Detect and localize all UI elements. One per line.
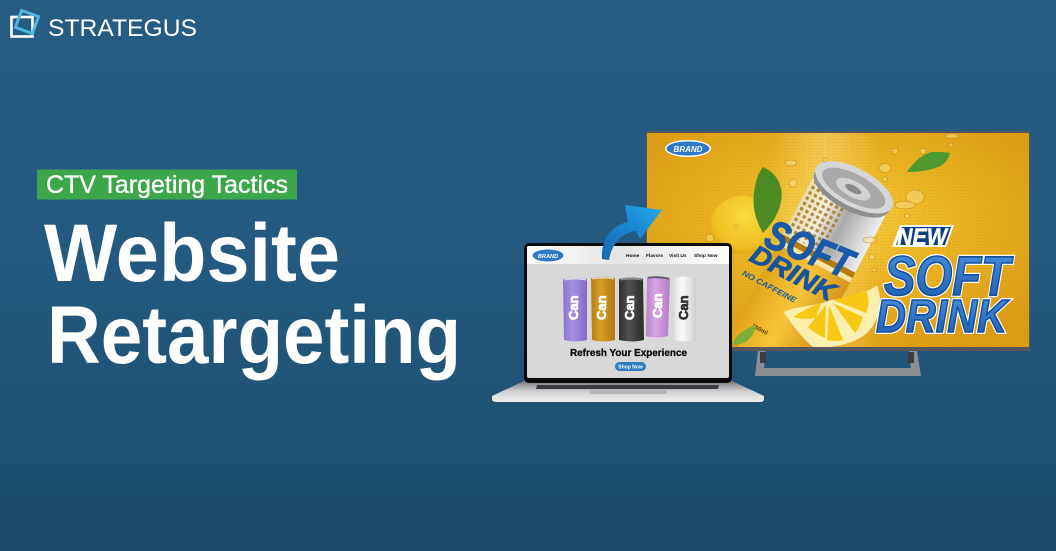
laptop: [492, 243, 764, 402]
can: SOFT: [759, 211, 862, 288]
site header: [527, 246, 729, 264]
small leaf at can base: [733, 325, 756, 345]
can: DRINK: [745, 239, 843, 308]
TV stand: [755, 351, 921, 376]
title: Website Retargeting: Retargeting: [47, 290, 461, 381]
laptop base: [492, 381, 764, 402]
site navigation: Flavors: [646, 253, 663, 259]
can: 350ml: [751, 323, 769, 337]
leaf right: [907, 152, 950, 172]
can: purple: Can: [566, 295, 581, 320]
can: gold: Can: [594, 295, 609, 320]
site brand badge: BRAND: [538, 254, 558, 260]
icon: overlapping squares: [12, 10, 39, 37]
title: Website Retargeting: Website: [44, 208, 340, 299]
can: pink: Can: [650, 293, 665, 318]
site brand badge: [532, 250, 564, 262]
site navigation: Shop Now: [694, 253, 718, 259]
site button: [615, 362, 646, 371]
arrow from laptop to TV: [602, 205, 662, 260]
headline: NEW SOFT DRINK: [876, 224, 1014, 342]
site navigation: [626, 253, 718, 259]
can: black: Can: [622, 295, 637, 320]
headline: NEW SOFT DRINK: DRINK: [876, 290, 1009, 342]
lemon slice: [784, 285, 880, 347]
lemon: [711, 196, 773, 254]
headline: NEW SOFT DRINK: DRINK: [876, 290, 1009, 342]
site navigation: Visit Us: [669, 253, 687, 259]
TV: [646, 131, 1030, 380]
site button: Shop Now: [618, 364, 643, 370]
headline: NEW SOFT DRINK: NEW: [897, 224, 949, 251]
TV screen ad: [647, 133, 1029, 347]
brand badge: [665, 140, 711, 157]
title: Website Retargeting: [44, 208, 461, 381]
leaf left: [753, 167, 782, 233]
brand badge: BRAND: [674, 145, 703, 154]
TV frame: [646, 131, 1030, 351]
can: NO CAFFEINE: [741, 269, 798, 305]
headline: NEW SOFT DRINK: SOFT: [884, 244, 1014, 307]
can: white: Can: [676, 295, 691, 320]
laptop bezel: [524, 243, 732, 383]
site headline: Refresh Your Experience: [570, 347, 687, 359]
can: [732, 161, 894, 347]
wordmark: STRATEGUS: [48, 15, 197, 42]
product cans: [563, 276, 696, 342]
website screen: [527, 246, 729, 378]
headline: NEW SOFT DRINK: SOFT: [884, 244, 1014, 307]
badge: CTV Targeting Tactics: CTV Targeting Tactics: [46, 171, 288, 199]
logo: Strategus: [12, 10, 197, 42]
site navigation: Home: [626, 253, 640, 259]
water droplets: [706, 134, 959, 272]
